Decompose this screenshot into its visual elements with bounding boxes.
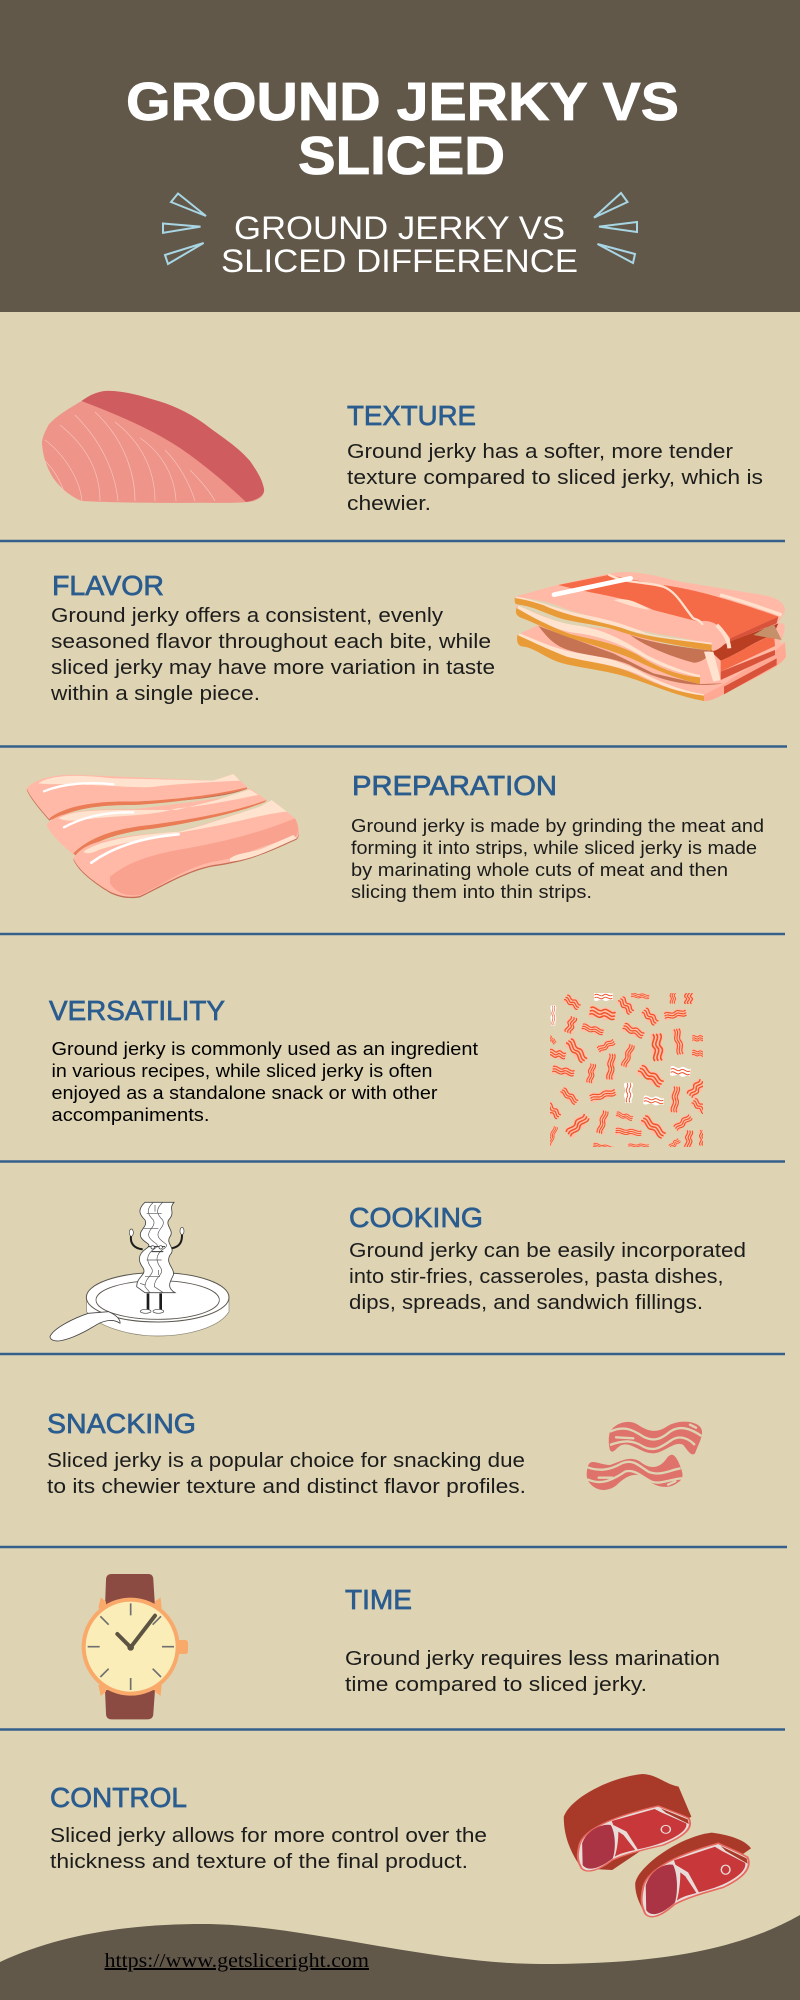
text block: texture: chewier. <box>347 493 431 515</box>
text block: preparation: Ground jerky is made by grinding the meat and <box>351 816 764 836</box>
text block: preparation: forming it into strips, while sliced jerky is made <box>351 838 757 858</box>
text block: snacking <box>47 1450 526 1498</box>
text block: snacking: Sliced jerky is a popular choice for snacking due <box>47 1450 525 1472</box>
text block: versatility: Ground jerky is commonly used as an ingredient <box>52 1039 478 1059</box>
text block: versatility: accompaniments. <box>52 1105 210 1125</box>
icon: stacked bacon <box>515 572 786 701</box>
text block: snacking: to its chewier texture and distinct flavor profiles. <box>47 1476 526 1498</box>
heading: preparation: PREPARATION <box>352 770 557 801</box>
panel: cooking <box>50 1202 746 1341</box>
panel: flavor <box>50 570 786 705</box>
panel: preparation <box>27 770 764 902</box>
footer wave <box>0 1915 800 2000</box>
text block: texture: Ground jerky has a softer, more tender <box>347 441 733 463</box>
title: GROUND JERKY VS <box>126 72 679 132</box>
icon: bacon character in frying pan <box>50 1202 229 1341</box>
text block: cooking <box>349 1240 746 1314</box>
text block: time <box>345 1648 720 1696</box>
panel: time <box>82 1574 720 1719</box>
icon: raw bacon strips <box>27 774 299 898</box>
title <box>126 72 679 186</box>
title: SLICED <box>298 126 505 186</box>
text block: preparation: by marinating whole cuts of meat and then <box>351 860 728 880</box>
heading: control: CONTROL <box>50 1782 187 1813</box>
text block: versatility <box>52 1039 478 1125</box>
text block: flavor <box>50 605 495 705</box>
text block: flavor: Ground jerky offers a consistent, evenly <box>51 605 443 627</box>
text block: cooking: dips, spreads, and sandwich fillings. <box>349 1292 703 1314</box>
icon: right spark lines <box>594 193 637 263</box>
panel: texture <box>42 391 763 515</box>
heading: snacking: SNACKING <box>47 1408 196 1439</box>
heading: versatility: VERSATILITY <box>49 995 225 1026</box>
icon: raw tuna cut <box>42 391 264 503</box>
text block: control <box>50 1825 487 1873</box>
text block: preparation: slicing them into thin strips. <box>351 882 592 902</box>
panel: versatility <box>49 990 710 1152</box>
text block: flavor: sliced jerky may have more variation in taste <box>51 657 495 679</box>
icon: raw steaks <box>564 1774 751 1917</box>
source link text: https://www.getsliceright.com <box>104 1950 369 1972</box>
text block: versatility: in various recipes, while sliced jerky is often <box>52 1061 432 1081</box>
panel: control <box>50 1774 751 1917</box>
text block: cooking: into stir-fries, casseroles, pasta dishes, <box>349 1266 724 1288</box>
heading: flavor: FLAVOR <box>52 570 164 601</box>
text block: texture: texture compared to sliced jerky, which is <box>347 467 763 489</box>
text block: texture <box>347 441 763 515</box>
text block: time: time compared to sliced jerky. <box>345 1674 647 1696</box>
text block: versatility: enjoyed as a standalone snack or with other <box>52 1083 438 1103</box>
text block: time: Ground jerky requires less marination <box>345 1648 720 1670</box>
panel: snacking <box>47 1408 702 1498</box>
text block: preparation <box>351 816 764 902</box>
icon: wristwatch <box>82 1574 188 1719</box>
heading: time: TIME <box>345 1584 412 1615</box>
text block: flavor: seasoned flavor throughout each bite, while <box>51 631 491 653</box>
text block: flavor: within a single piece. <box>50 683 260 705</box>
text block: cooking: Ground jerky can be easily incorporated <box>349 1240 746 1262</box>
subtitle: GROUND JERKY VS <box>234 210 565 246</box>
text block: control: Sliced jerky allows for more control over the <box>50 1825 487 1847</box>
text block: control: thickness and texture of the final product. <box>50 1851 468 1873</box>
heading: texture: TEXTURE <box>347 400 476 431</box>
icon: left spark lines <box>163 194 206 264</box>
icon: bacon strips <box>587 1422 702 1490</box>
subtitle <box>221 210 578 279</box>
icon: bacon pattern <box>550 993 703 1147</box>
heading: cooking: COOKING <box>349 1202 483 1233</box>
subtitle: SLICED DIFFERENCE <box>221 243 578 279</box>
header banner <box>0 0 800 312</box>
